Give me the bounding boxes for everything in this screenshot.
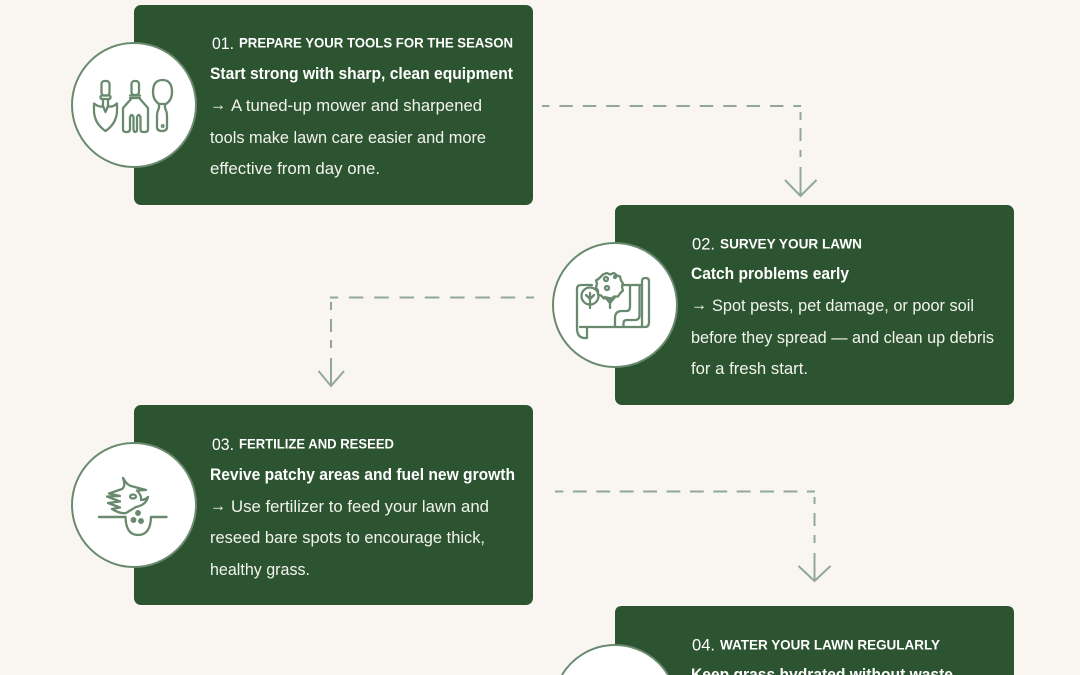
step 3 body: healthy grass. — [210, 561, 310, 579]
icon: landscape plan — [577, 273, 649, 338]
panel: step 1 — [72, 5, 533, 205]
step 3 circle — [72, 443, 196, 567]
step 1 body — [210, 96, 486, 178]
panel: step 2: SURVEY YOUR LAWN — [720, 236, 862, 252]
arrow: step 1 to step 2 — [542, 106, 816, 196]
step 1 subheading: Start strong with sharp, clean equipment — [210, 65, 513, 83]
step 1 body: A tuned-up mower and sharpened — [231, 97, 482, 115]
step 1 heading: 01. — [212, 34, 234, 53]
step 3 body: reseed bare spots to encourage thick, — [210, 529, 485, 547]
step 2 heading: 02. — [692, 234, 715, 254]
panel: step 2 — [553, 205, 1014, 405]
panel: step 4: WATER YOUR LAWN REGULARLY — [720, 636, 941, 652]
step 3 subheading: Revive patchy areas and fuel new growth — [210, 466, 515, 484]
step 1 body: effective from day one. — [210, 160, 380, 178]
step 2 circle — [553, 243, 677, 367]
step 2 body: Spot pests, pet damage, or poor soil — [712, 297, 974, 315]
step 1 body: tools make lawn care easier and more — [210, 129, 486, 147]
step 2 subheading: Catch problems early — [691, 265, 850, 283]
step 3 body — [210, 497, 489, 579]
step 2 body: for a fresh start. — [691, 360, 808, 378]
step 3 body: → — [210, 497, 226, 515]
step 4 circle — [562, 645, 668, 675]
step 1 body: → — [210, 96, 226, 114]
panel: step 3 — [72, 405, 533, 605]
arrow: step 3 to step 4 — [555, 492, 830, 581]
panel: step 3: FERTILIZE AND RESEED — [239, 436, 394, 452]
step 3 body: Use fertilizer to feed your lawn and — [231, 498, 489, 516]
icon: hand sowing seeds — [99, 478, 166, 535]
step 2 body: before they spread — and clean up debris — [691, 329, 994, 347]
step 1 circle — [72, 43, 196, 167]
panel: step 1: PREPARE YOUR TOOLS FOR THE SEASON — [239, 34, 513, 50]
panel: step 4 — [562, 606, 1014, 675]
arrow: step 2 to step 3 — [318, 298, 534, 386]
step 4 heading: 04. — [692, 636, 715, 654]
step 3 heading: 03. — [212, 435, 234, 454]
icon: garden tools — [94, 80, 172, 132]
step 2 body — [691, 296, 994, 378]
step 2 body: → — [691, 296, 707, 314]
